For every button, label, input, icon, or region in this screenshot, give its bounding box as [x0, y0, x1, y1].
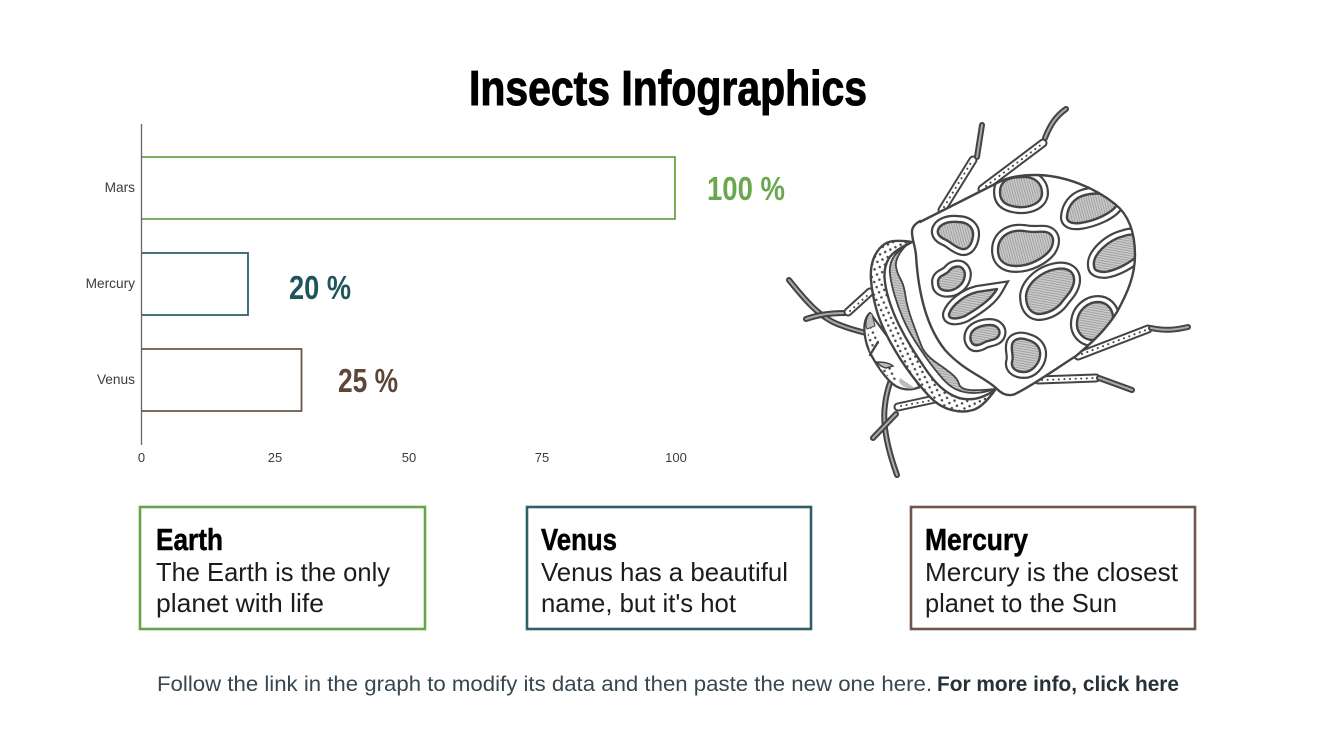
card: Venus [527, 507, 811, 629]
category labels: Mercury [86, 276, 135, 291]
card text [156, 557, 390, 618]
collar backing [871, 241, 995, 412]
card heading: Venus [541, 522, 617, 557]
horizontal axis labels: 25 [268, 450, 282, 465]
bar: Mercury [142, 253, 248, 315]
footer note: Follow the link in the graph to modify its data and then paste the new one here. [157, 673, 932, 696]
horizontal axis labels: 100 [665, 450, 687, 465]
body shell [912, 175, 1135, 395]
bar: Mars [142, 157, 675, 219]
card: Earth [140, 507, 425, 629]
card text: The Earth is the only [156, 557, 390, 587]
value: 100 %: 100 % [707, 170, 785, 207]
card text: Mercury is the closest [925, 557, 1179, 587]
horizontal axis labels: 50 [402, 450, 416, 465]
bar chart [86, 124, 687, 465]
card text: planet to the Sun [925, 588, 1117, 618]
card text: name, but it's hot [541, 588, 737, 618]
card heading: Earth [156, 522, 223, 557]
hatched collar band [890, 242, 995, 393]
shell spots [938, 177, 1136, 372]
body outline [912, 175, 1135, 395]
category labels: Venus [97, 372, 135, 387]
card text [541, 557, 788, 618]
card: Mercury [911, 507, 1195, 629]
card text: Venus has a beautiful [541, 557, 788, 587]
legs and antennae [789, 109, 1188, 475]
category labels: Mars [105, 180, 135, 195]
value: 20 %: 20 % [289, 269, 351, 306]
dotted collar band [871, 241, 995, 412]
icon: beetle illustration [789, 109, 1188, 475]
category labels [86, 180, 135, 387]
footer note: For more info, click here [937, 673, 1179, 696]
card text [925, 557, 1179, 618]
vertical axis [140, 124, 142, 445]
card text: planet with life [156, 588, 324, 618]
card heading: Mercury [925, 522, 1029, 557]
horizontal axis labels: 0 [138, 450, 145, 465]
bar: Venus [142, 349, 302, 411]
horizontal axis labels: 75 [535, 450, 549, 465]
value: 25 %: 25 % [338, 362, 398, 399]
title: Insects Infographics [469, 62, 867, 116]
thorax lower segments [864, 313, 920, 389]
horizontal axis labels [138, 450, 687, 465]
